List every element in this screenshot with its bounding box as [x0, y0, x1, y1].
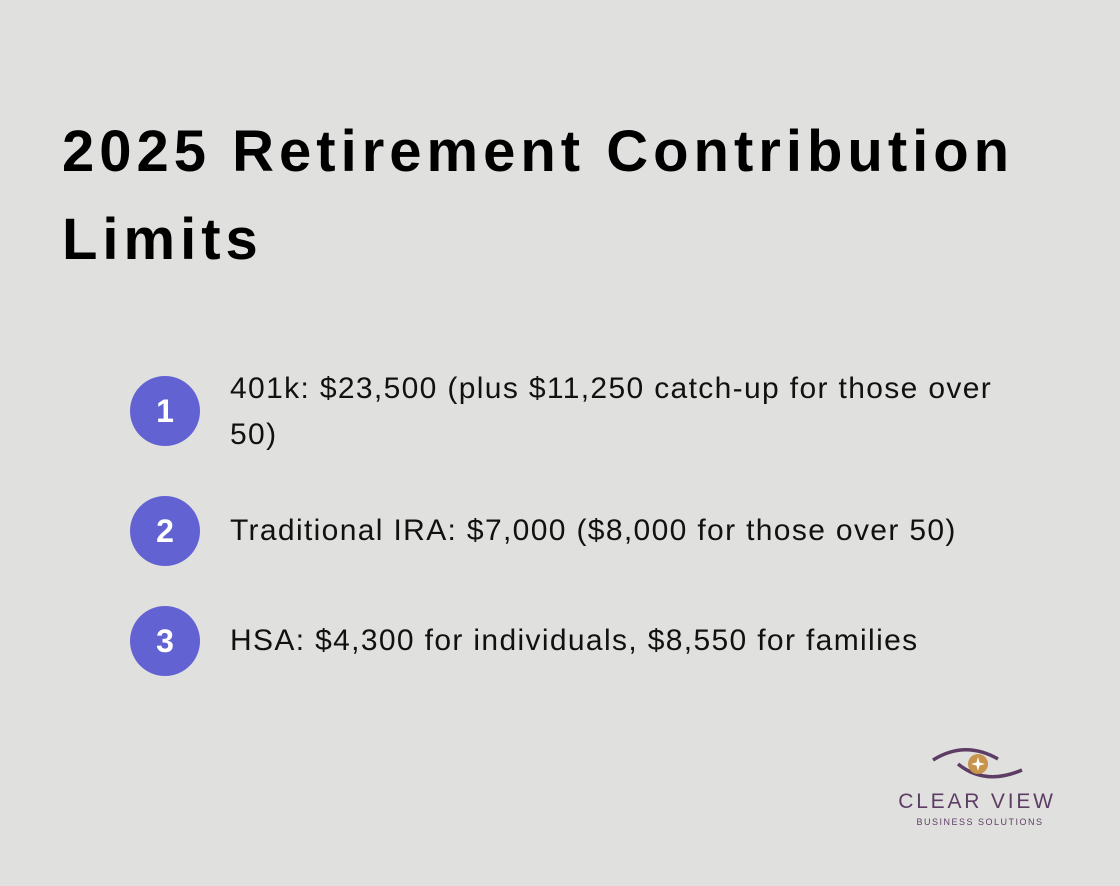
- badge 3: [130, 606, 200, 676]
- text 3: HSA: $4,300 for individuals, $8,550 for families: [230, 624, 918, 657]
- badge 3: 3: [156, 623, 174, 659]
- badge 2: 2: [156, 513, 174, 549]
- text 1: [230, 372, 992, 451]
- title: 2025 Retirement Contribution: [62, 119, 1014, 184]
- text 1: 50): [230, 418, 277, 451]
- brand name: CLEAR VIEW: [898, 790, 1056, 813]
- badge 1: [130, 376, 200, 446]
- item 2: [130, 496, 957, 566]
- icon: eye: [932, 748, 1023, 778]
- title: Limits: [62, 207, 263, 272]
- tagline: BUSINESS SOLUTIONS: [916, 817, 1044, 827]
- logo: [898, 748, 1056, 827]
- text 1: 401k: $23,500 (plus $11,250 catch-up for those over: [230, 372, 992, 405]
- item 3: [130, 606, 918, 676]
- item 1: [130, 372, 992, 451]
- text 2: Traditional IRA: $7,000 ($8,000 for those over 50): [230, 514, 957, 547]
- badge 1: 1: [156, 393, 174, 429]
- badge 2: [130, 496, 200, 566]
- title: [62, 119, 1014, 272]
